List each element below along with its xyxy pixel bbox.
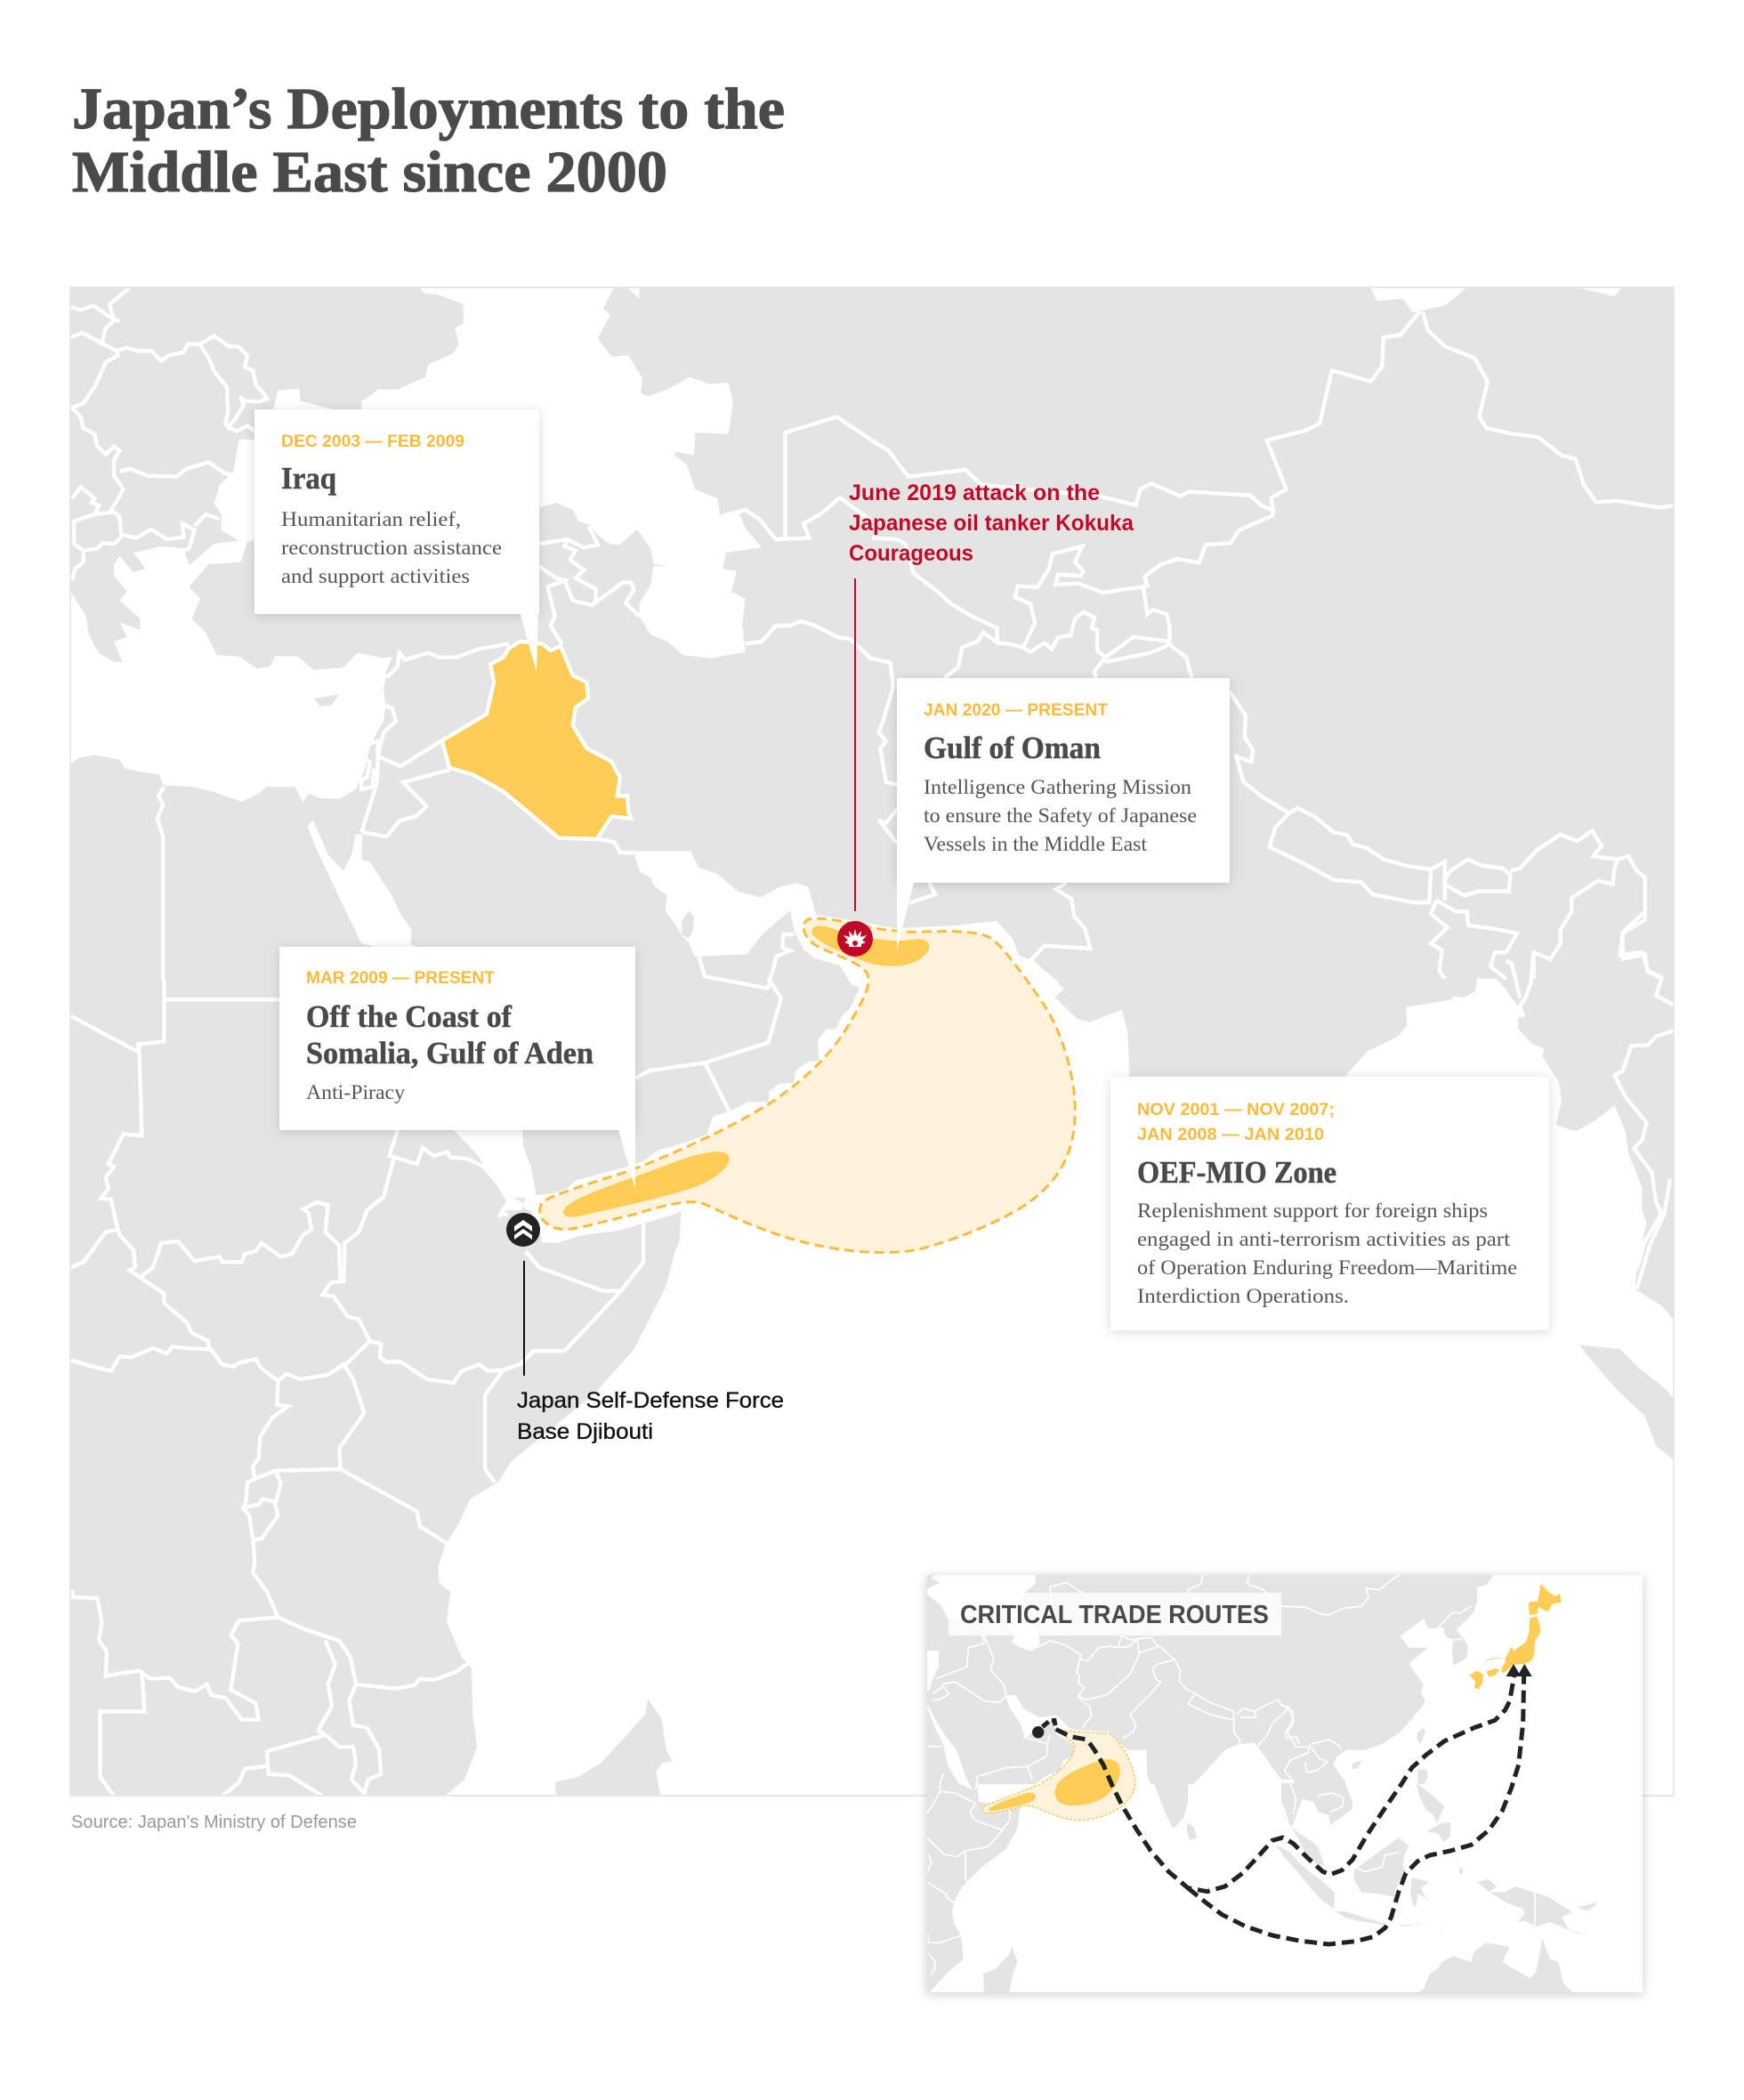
description: Anti-Piracy	[306, 1081, 406, 1103]
OEF-MIO callout pointer	[1045, 1077, 1110, 1103]
description	[924, 776, 1197, 855]
description: Interdiction Operations.	[1137, 1285, 1349, 1307]
description: engaged in anti-terrorism activities as part	[1137, 1228, 1511, 1250]
icon: base marker	[506, 1213, 540, 1247]
heading	[306, 999, 593, 1070]
title: Japan’s Deployments to the	[72, 77, 785, 141]
description: of Operation Enduring Freedom—Maritime	[1137, 1256, 1517, 1279]
annotation: Djibouti base: Base Djibouti	[517, 1419, 653, 1444]
highlight: Iraq	[442, 642, 631, 839]
inset: Japan	[1470, 1584, 1562, 1689]
callout: Gulf of Oman	[897, 678, 1230, 949]
annotation: tanker attack	[849, 481, 1134, 911]
date: DEC 2003 — FEB 2009	[281, 432, 464, 451]
panel: critical trade routes inset	[925, 1575, 1644, 1998]
date: JAN 2020 — PRESENT	[924, 701, 1108, 720]
annotation: tanker attack: Japanese oil tanker Kokuka	[849, 511, 1134, 536]
description: to ensure the Safety of Japanese	[924, 804, 1197, 827]
annotation: tanker attack: June 2019 attack on the	[849, 481, 1100, 505]
date: NOV 2001 — NOV 2007;	[1137, 1101, 1335, 1119]
source note: Source: Japan's Ministry of Defense	[71, 1813, 357, 1832]
description: and support activities	[281, 565, 470, 587]
inset label: CRITICAL TRADE ROUTES	[960, 1601, 1269, 1629]
route: via Strait of Malacca	[1056, 1676, 1514, 1892]
date: JAN 2008 — JAN 2010	[1137, 1126, 1324, 1144]
heading: Somalia, Gulf of Aden	[306, 1036, 593, 1070]
annotation: Djibouti base	[517, 1261, 784, 1444]
callout: Off the Coast of Somalia	[279, 947, 635, 1189]
zone: Gulf of Aden	[563, 1151, 730, 1217]
callout: Iraq	[254, 409, 539, 672]
inset label	[949, 1593, 1281, 1636]
description: reconstruction assistance	[281, 537, 502, 559]
icon: explosion	[837, 921, 873, 957]
annotation: Djibouti base: Japan Self-Defense Force	[517, 1388, 784, 1413]
description	[281, 508, 502, 587]
description: Replenishment support for foreign ships	[1137, 1199, 1488, 1222]
inset: OEF-MIO zone	[982, 1729, 1135, 1821]
inset: Gulf of Aden blob	[989, 1793, 1036, 1811]
heading: OEF-MIO Zone	[1137, 1155, 1336, 1190]
date: MAR 2009 — PRESENT	[306, 969, 495, 988]
panel: main map	[67, 287, 1675, 1797]
route origin: Persian Gulf	[1032, 1720, 1056, 1738]
title	[72, 77, 785, 205]
heading: Iraq	[281, 461, 336, 496]
description: Intelligence Gathering Mission	[924, 776, 1192, 798]
description	[1137, 1199, 1517, 1307]
route: via Lombok Strait	[1188, 1676, 1524, 1944]
map outline	[70, 287, 1674, 1796]
inset: patrol area blob	[1054, 1759, 1120, 1805]
annotation: tanker attack: Courageous	[849, 541, 973, 566]
arrowheads	[1506, 1664, 1532, 1676]
zone: Gulf of Oman	[812, 926, 929, 966]
heading: Gulf of Oman	[924, 731, 1101, 765]
callout: OEF-MIO Zone	[1110, 1077, 1549, 1330]
description: Humanitarian relief,	[281, 508, 461, 530]
heading: Off the Coast of	[306, 999, 512, 1034]
zone: OEF-MIO patrol area	[540, 918, 1075, 1253]
description: Vessels in the Middle East	[924, 833, 1148, 855]
date	[1137, 1101, 1335, 1144]
title: Middle East since 2000	[72, 140, 667, 205]
